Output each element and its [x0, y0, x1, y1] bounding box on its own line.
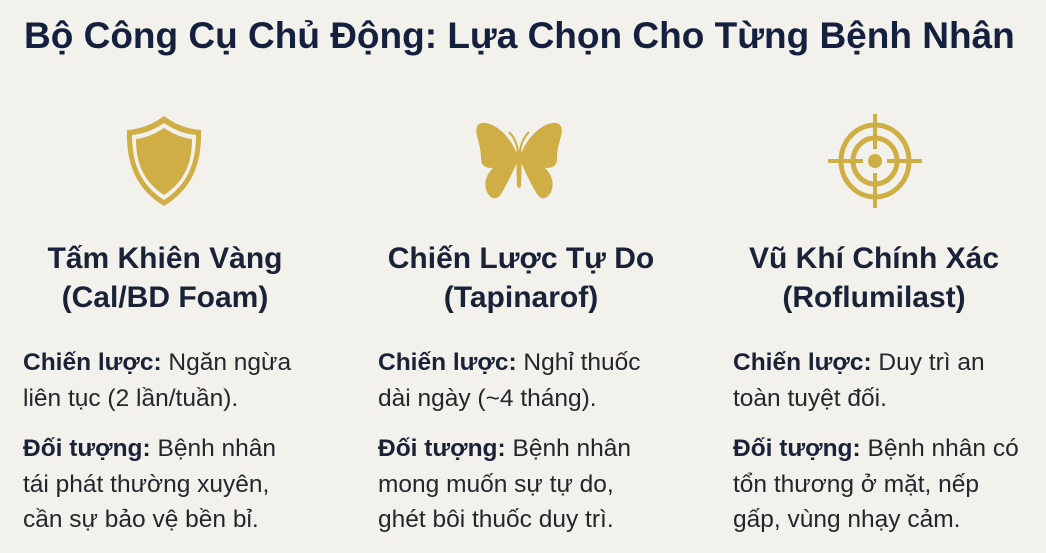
icon: butterfly	[476, 122, 562, 198]
panel: Cal/BD Foam	[23, 116, 292, 533]
icon: shield	[126, 116, 202, 206]
heading: Chiến Lược Tự Do	[388, 242, 654, 275]
text block: Chiến lược: Duy trì an	[733, 349, 985, 376]
heading: Tấm Khiên Vàng	[47, 242, 283, 275]
text block: mong muốn sự tự do,	[378, 470, 614, 498]
panel: Tapinarof	[378, 122, 654, 533]
heading: Vũ Khí Chính Xác	[749, 242, 999, 275]
text block	[733, 435, 1019, 533]
text block: cần sự bảo vệ bền bỉ.	[23, 506, 259, 533]
text block: ghét bôi thuốc duy trì.	[378, 506, 614, 533]
text block: tái phát thường xuyên,	[23, 470, 269, 498]
heading	[749, 242, 999, 314]
heading	[388, 242, 654, 314]
text block: dài ngày (~4 tháng).	[378, 384, 597, 412]
text block	[23, 435, 276, 533]
text block: tổn thương ở mặt, nếp	[733, 470, 979, 498]
heading	[47, 242, 283, 314]
text block: liên tục (2 lần/tuần).	[23, 384, 238, 412]
text block: toàn tuyệt đối.	[733, 384, 887, 412]
text block	[378, 349, 641, 412]
text block: Chiến lược: Nghỉ thuốc	[378, 349, 641, 376]
heading: (Tapinarof)	[444, 281, 598, 314]
text block: Đối tượng: Bệnh nhân có	[733, 435, 1019, 462]
text block: Đối tượng: Bệnh nhân	[378, 435, 631, 462]
text block	[23, 349, 292, 412]
heading: (Roflumilast)	[782, 281, 966, 314]
text block: gấp, vùng nhạy cảm.	[733, 506, 960, 533]
text block: Đối tượng: Bệnh nhân	[23, 435, 276, 462]
title: Bộ Công Cụ Chủ Động: Lựa Chọn Cho Từng Bệnh Nhân	[24, 15, 1015, 56]
heading: (Cal/BD Foam)	[62, 281, 268, 314]
icon: target	[828, 114, 922, 208]
text block	[378, 435, 631, 533]
text block	[733, 349, 985, 412]
panel: Roflumilast	[733, 114, 1019, 533]
text block: Chiến lược: Ngăn ngừa	[23, 349, 291, 376]
